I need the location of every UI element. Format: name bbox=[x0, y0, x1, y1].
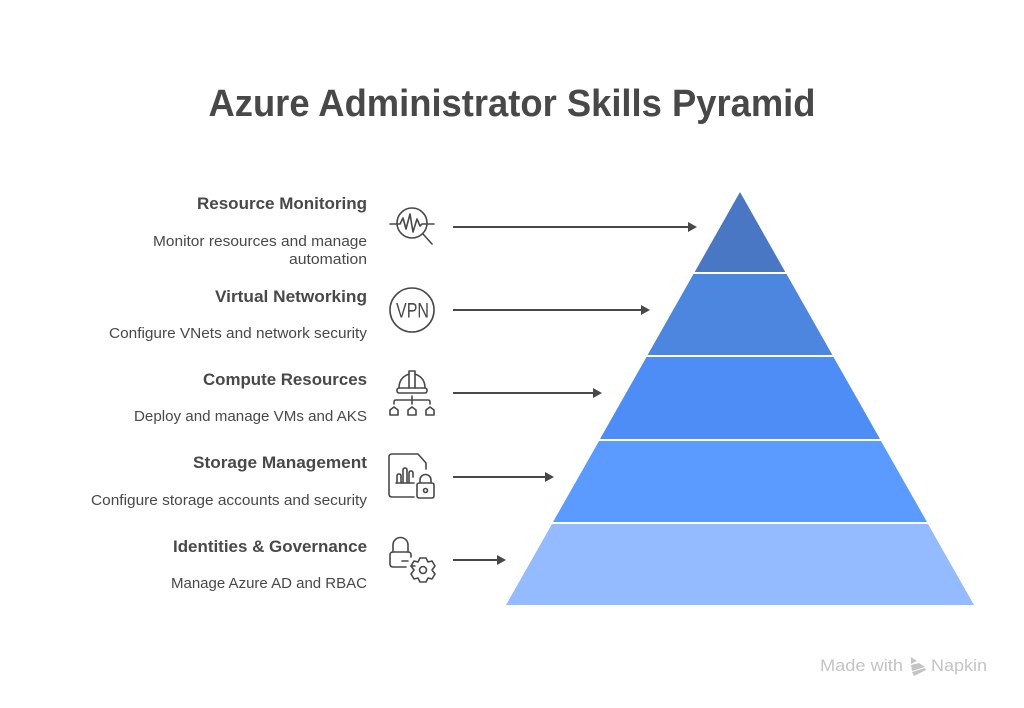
text block: resource monitoring: automation bbox=[289, 252, 367, 268]
arrow: identities and governance bbox=[453, 555, 506, 565]
arrow: resource monitoring bbox=[453, 222, 697, 232]
watermark: made with napkin: Napkin bbox=[931, 656, 987, 675]
arrow: compute resources bbox=[453, 388, 602, 398]
text block: resource monitoring: Monitor resources and manage bbox=[153, 234, 367, 250]
arrow: storage management bbox=[453, 472, 554, 482]
icon: napkin logo bbox=[911, 657, 926, 676]
text block: resource monitoring bbox=[153, 194, 367, 268]
text block: virtual networking bbox=[109, 287, 368, 342]
arrow: virtual networking bbox=[453, 305, 650, 315]
pyramid level 5: resource monitoring bbox=[695, 192, 785, 272]
pyramid level 1: identities and governance bbox=[506, 524, 974, 605]
icon: hard hat hierarchy bbox=[390, 371, 434, 415]
text block: compute resources: Compute Resources bbox=[203, 370, 367, 389]
title: Azure Administrator Skills Pyramid bbox=[208, 83, 816, 125]
text block: storage management: Configure storage accounts and security bbox=[91, 493, 368, 509]
text block: virtual networking: Virtual Networking bbox=[215, 287, 367, 306]
text block: identities and governance: Manage Azure AD and RBAC bbox=[171, 576, 367, 592]
text block: resource monitoring: Resource Monitoring bbox=[197, 194, 367, 213]
pyramid bbox=[506, 192, 974, 605]
text block: compute resources bbox=[134, 370, 367, 425]
watermark: made with napkin bbox=[820, 656, 987, 676]
icon: document chart with lock bbox=[389, 454, 434, 498]
pyramid level 2: storage management bbox=[553, 441, 927, 522]
text block: compute resources: Deploy and manage VMs and AKS bbox=[134, 409, 367, 425]
icon: VPN badge bbox=[390, 288, 434, 332]
text block: identities and governance: Identities & Governance bbox=[173, 537, 367, 556]
pyramid level 3: compute resources bbox=[600, 357, 880, 439]
icon: lock with gear bbox=[390, 538, 435, 582]
watermark: made with napkin: Made with bbox=[820, 656, 903, 675]
icon: waveform magnifier bbox=[390, 208, 434, 244]
icon: VPN badge: VPN bbox=[396, 300, 429, 322]
pyramid level 4: virtual networking bbox=[648, 274, 832, 355]
text block: storage management bbox=[91, 453, 368, 509]
text block: virtual networking: Configure VNets and network security bbox=[109, 326, 368, 342]
text block: storage management: Storage Management bbox=[193, 453, 367, 472]
text block: identities and governance bbox=[171, 537, 367, 592]
